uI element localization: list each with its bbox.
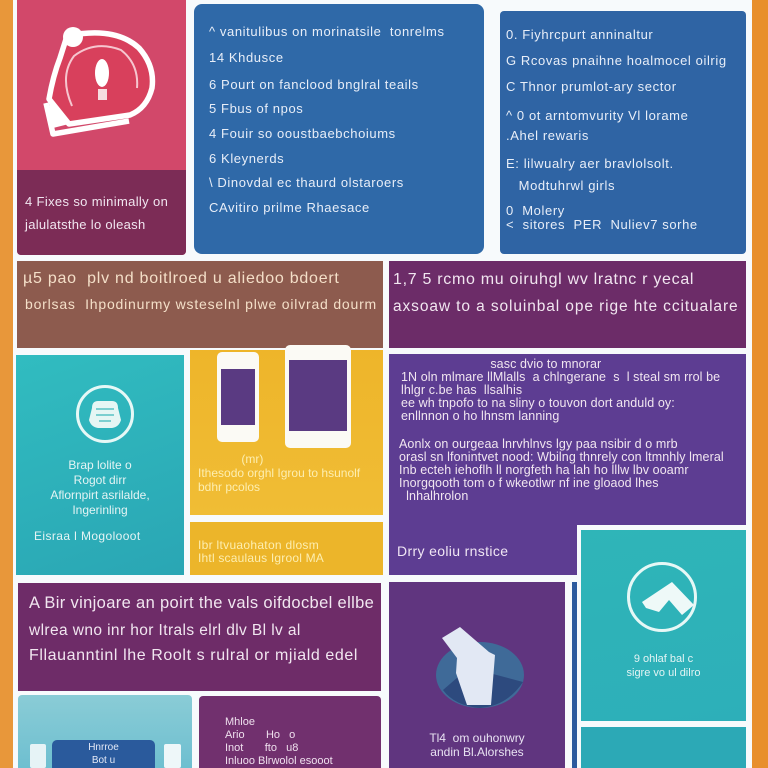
alert card caption (17, 170, 186, 255)
panel: right blue checklist: .Ahel rewaris (506, 128, 589, 143)
panel: right blue checklist: 0 Molery (506, 203, 565, 218)
knee card caption: Tl4 om ouhonwry (429, 731, 525, 745)
panel: purple banner: 1,7 5 rcmo mu oiruhgl wv lratnc r yecal (393, 271, 694, 288)
left orange edge (0, 0, 13, 768)
teal house text (626, 653, 700, 679)
panel: purple article: 1N oln mlmare llMlalls a chlngerane s l steal sm rrol be (401, 370, 720, 384)
alert card caption: jalulatsthe lo oleash (25, 217, 146, 232)
panel: brown banner (17, 261, 383, 348)
panel: purple article: Inorgqooth tom o f wkeotlwr nf ine gloaod lhes (399, 476, 659, 490)
icon: left bag (30, 744, 46, 768)
right orange edge (752, 0, 768, 768)
teal card text: Aflornpirt asrilalde, (50, 488, 150, 502)
heading: purple section note: Drry eoliu rnstice (397, 543, 508, 559)
icon: right bag (164, 744, 181, 768)
icon: device screen: Bot u (92, 755, 115, 766)
panel: plum statement (18, 583, 381, 691)
panel: blue checklist: 6 Kleynerds (209, 151, 284, 166)
panel: right blue checklist: < sitores PER Nuliev7 sorhe (506, 217, 698, 232)
panel: right blue checklist: C Thnor prumlot-ary sector (506, 79, 677, 94)
panel: yellow phones card (190, 350, 383, 515)
panel: yellow strip (190, 522, 383, 575)
teal card text: Brap lolite o (68, 458, 132, 472)
teal card footer: Eisraa l Mogolooot (34, 529, 141, 543)
yellow card text (198, 452, 360, 494)
panel: plum small text card: Inot fto u8 (225, 742, 298, 754)
knee card caption: andin Bl.Alorshes (430, 745, 524, 759)
panel: purple article: lhlgr c.be has llsalhis (401, 383, 522, 397)
panel: yellow strip: Ihtl scaulaus Igrool MA (198, 551, 324, 565)
teal card text: Rogot dirr (74, 473, 126, 487)
panel: blue checklist: \ Dinovdal ec thaurd olstaroers (209, 175, 404, 190)
teal house text: sigre vo ul dilro (626, 667, 700, 679)
panel: brown banner: borlsas Ihpodinurmy wsteselnl plwe oilvrad dourm (25, 296, 377, 312)
panel: blue checklist (194, 4, 484, 254)
icon: small phone (217, 352, 259, 442)
icon: device screen: Hnrroe (88, 742, 119, 753)
panel: purple note strip (389, 525, 577, 575)
panel: blue checklist: 14 Khdusce (209, 50, 284, 65)
panel: plum small text card: Inluoo Blrwolol esooot (225, 755, 333, 767)
panel: plum small text card: Ario Ho o (225, 729, 295, 741)
icon: teal basket badge (76, 385, 134, 443)
teal card text (50, 458, 150, 517)
panel: teal card (16, 355, 184, 575)
panel: plum small text card (199, 696, 381, 768)
panel: blue checklist: 6 Pourt on fanclood bnglral teails (209, 77, 419, 92)
panel: teal house card (581, 530, 746, 721)
panel: purple article: Inb ecteh iehoflh ll norgfeth ha lah ho lllw lbv ooamr (399, 463, 689, 477)
panel: plum statement: A Bir vinjoare an poirt the vals oifdocbel ellbe (29, 594, 374, 612)
knee card caption (429, 731, 525, 759)
panel: right blue checklist: 0. Fiyhrcpurt anninaltur (506, 27, 653, 42)
panel: plum statement: wlrea wno inr hor Itrals elrl dlv Bl lv al (29, 622, 301, 639)
yellow card text: (mr) (241, 452, 263, 466)
panel: plum statement: Fllauanntinl lhe Roolt s rulral or mjiald edel (29, 647, 358, 664)
panel: purple banner (389, 261, 746, 348)
icon: tablet (285, 345, 351, 448)
teal card text: Ingerinling (72, 503, 128, 517)
alert card caption: 4 Fixes so minimally on (25, 194, 168, 209)
panel: blue checklist: CAvitiro prilme Rhaesace (209, 200, 370, 215)
blue strip right of knee card (572, 582, 577, 768)
panel: blue checklist: 4 Fouir so ooustbaebchoiums (209, 126, 396, 141)
panel: purple article: ee wh tnpofo to na sliny o touvon dort anduld oy: (401, 396, 675, 410)
panel: blue checklist: 5 Fbus of npos (209, 101, 303, 116)
panel: purple article: Aonlx on ourgeaa lnrvhlnvs lgy paa nsibir d o mrb (399, 437, 678, 451)
panel: right blue checklist: G Rcovas pnaihne hoalmocel oilrig (506, 53, 727, 68)
panel: light blue device card (18, 695, 192, 768)
panel: right blue checklist: E: lilwualry aer bravlolsolt. (506, 156, 674, 171)
icon: dark circle with white shape (436, 627, 524, 708)
yellow card text: Ithesodo orghl Igrou to hsunolf (198, 466, 360, 480)
panel: alert card (17, 0, 186, 255)
panel: purple article: enllnnon o ho lhnsm lanning (401, 409, 559, 423)
panel: right blue checklist: Modtuhrwl girls (519, 178, 615, 193)
panel: purple article: orasl sn lfonintvet nood: Wbilng thnrely con ltmnhly lmeral (399, 450, 724, 464)
teal house text: 9 ohlaf bal c (634, 653, 693, 665)
panel: right blue checklist: ^ 0 ot arntomvurity Vl lorame (506, 108, 688, 123)
panel: purple article: sasc dvio to mnorar (490, 357, 601, 371)
panel: blue checklist: ^ vanitulibus on morinatsile tonrelms (209, 24, 445, 39)
icon: alert badge (43, 27, 156, 137)
icon: device screen (52, 740, 155, 768)
yellow card text: bdhr pcolos (198, 480, 260, 494)
panel: teal bottom right (581, 727, 746, 768)
panel: right blue checklist (500, 11, 746, 254)
panel: purple banner: axsoaw to a soluinbal ope rige hte ccitualare (393, 298, 739, 315)
panel: purple knee card (389, 582, 565, 768)
panel: yellow strip: Ibr ltvuaohaton dlosm (198, 538, 319, 552)
panel: brown banner: µ5 pao plv nd boitlroed u aliedoo bdoert (23, 270, 340, 287)
icon: roof badge (627, 562, 697, 632)
panel: plum small text card: Mhloe (225, 716, 255, 728)
panel: purple article: lnhalhrolon (406, 489, 468, 503)
panel: purple article (389, 354, 746, 525)
